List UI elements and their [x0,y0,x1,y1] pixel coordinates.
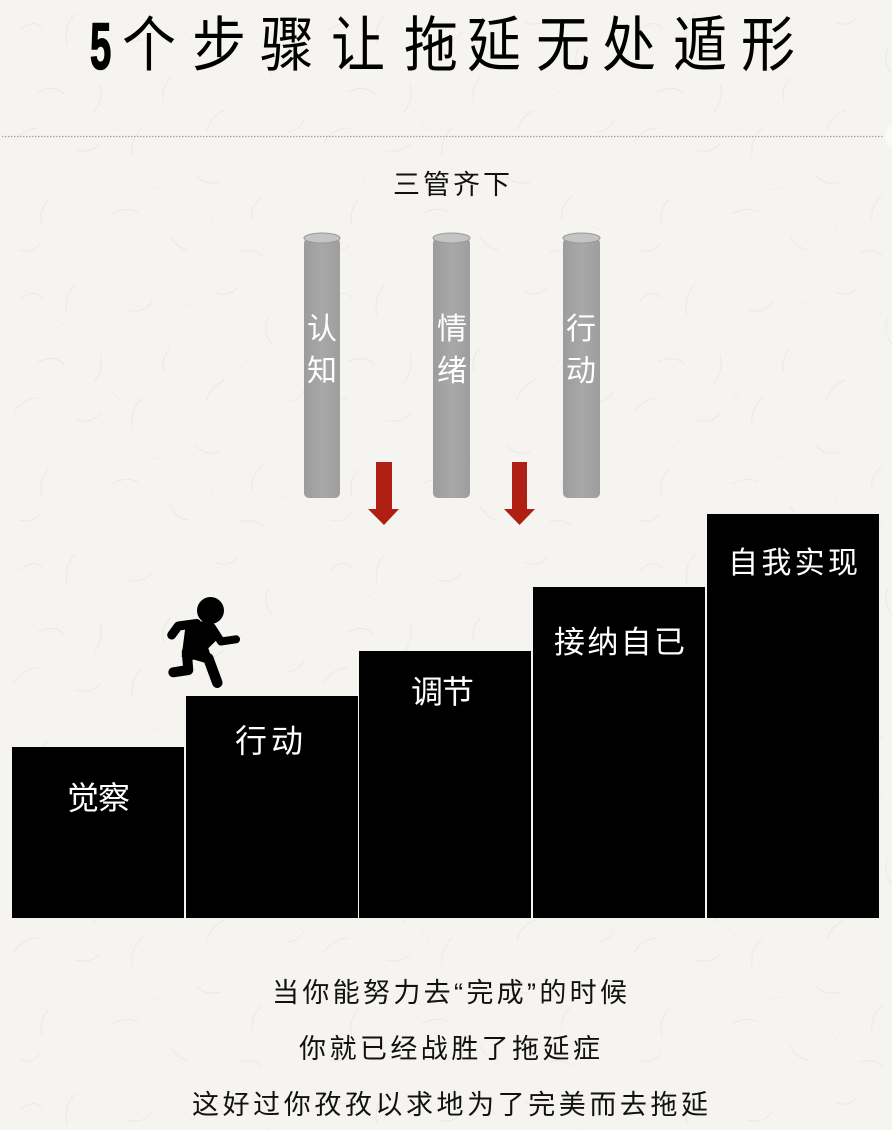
title: 5 [90,10,111,84]
step 3: 调节: 调节 [411,674,474,710]
pillar: 行动 [563,233,600,498]
subtitle: 三管齐下: 三管齐下 [393,170,510,200]
step 4: 接纳自已: 接纳自已 [554,625,685,660]
closing text: 这好过你孜孜以求地为了完美而去拖延 [192,1090,708,1120]
pillar: 认知 [304,233,340,498]
step 5: 自我实现 [707,514,879,918]
step 2: 行动: 行动 [235,723,303,759]
pillar: 情绪 [433,233,470,498]
pillar: 情绪: 绪 [437,355,467,388]
pillar: 认知: 知 [307,355,337,388]
step 3: 调节 [359,651,531,918]
step 1: 觉察: 觉察 [67,780,130,816]
arrow: left down arrow [368,462,399,525]
step 5: 自我实现: 自我实现 [728,547,858,580]
icon: running figure [172,597,236,683]
step 2: 行动 [186,696,358,918]
step 1: 觉察 [12,747,184,918]
closing text: 当你能努力去“完成”的时候 [272,978,627,1008]
arrow: right down arrow [504,462,535,525]
pillar: 行动: 动 [566,355,596,388]
closing text [192,978,708,1120]
title: 个步骤让拖延无处遁形 [122,12,795,80]
step 4: 接纳自已 [533,587,705,918]
pillar: 认知: 认 [307,313,337,346]
pillar: 情绪: 情 [437,313,467,346]
pillar: 行动: 行 [566,313,596,346]
closing text: 你就已经战胜了拖延症 [299,1034,600,1064]
